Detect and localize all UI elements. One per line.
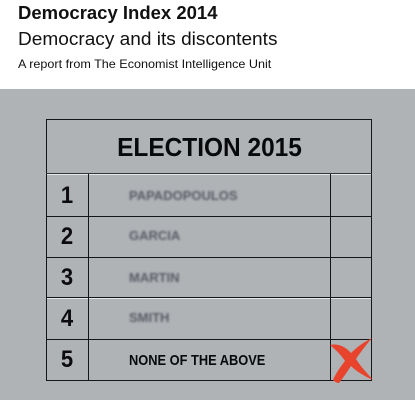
row 5 option: NONE OF THE ABOVE [129, 352, 265, 369]
ballot heading: ELECTION 2015 [117, 132, 302, 162]
row 4 candidate: SMITH [129, 310, 169, 325]
panel: grey ballot background [0, 89, 415, 400]
subtitle: Democracy and its discontents [18, 28, 277, 49]
row 2 number: 2 [61, 223, 73, 250]
row 2 candidate: GARCIA [129, 228, 180, 243]
row 4 number: 4 [61, 305, 73, 332]
row 1 number: 1 [61, 182, 73, 209]
row 5 number: 5 [61, 346, 73, 373]
row 1 candidate: PAPADOPOULOS [129, 188, 238, 203]
row 3 number: 3 [61, 264, 73, 291]
icon: red cross vote mark [330, 338, 373, 383]
report attribution: A report from The Economist Intelligence Unit [18, 57, 271, 71]
title: Democracy Index 2014 [18, 2, 218, 23]
row 3 candidate: MARTIN [129, 270, 180, 285]
